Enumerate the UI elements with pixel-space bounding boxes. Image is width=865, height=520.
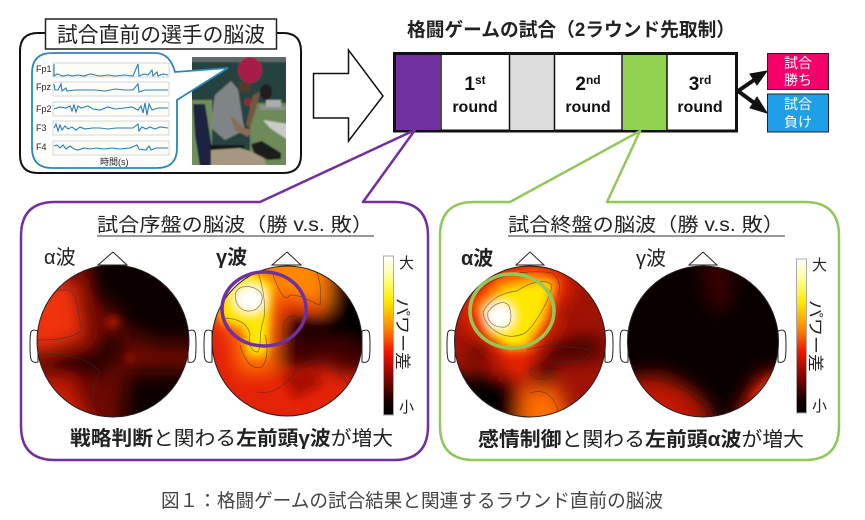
label: 1st round: round bbox=[452, 99, 498, 116]
segment: interval between rounds bbox=[510, 55, 554, 130]
label: 2nd round: nd bbox=[586, 73, 601, 87]
colorbar: power difference early: 大 bbox=[399, 255, 414, 272]
EEG channel F4: F4 bbox=[36, 142, 47, 152]
label: 1st round: 1 bbox=[464, 74, 475, 95]
label: gamma wave: γ波 bbox=[216, 246, 247, 269]
photo: player wearing EEG cap bbox=[190, 55, 288, 167]
label: 3rd round: round bbox=[677, 99, 723, 116]
segment: early match interval bbox=[396, 55, 440, 130]
EEG channel Fpz: Fpz bbox=[36, 82, 52, 92]
colorbar: power difference early: パワー差 bbox=[393, 298, 411, 370]
heading: pre-match EEG bbox=[46, 19, 276, 49]
colorbar: power difference late: 小 bbox=[812, 398, 827, 415]
panel: late match EEG bbox=[440, 131, 839, 460]
panel: pre-match EEG of the player bbox=[20, 19, 301, 173]
topomap: gamma early bbox=[204, 251, 370, 416]
callout: EEG traces bubble bbox=[32, 53, 228, 168]
arrow: from player EEG to match bbox=[314, 50, 383, 141]
label: alpha wave: α波 bbox=[461, 247, 493, 270]
result: match loss: 負け bbox=[784, 114, 812, 130]
highlight circle: left frontal gamma bbox=[222, 272, 306, 346]
label: gamma wave: γ波 bbox=[636, 247, 666, 270]
EEG channel Fp1 bbox=[36, 63, 169, 77]
label: 1st round: st bbox=[475, 73, 486, 87]
colorbar: power difference late: パワー差 bbox=[806, 300, 824, 372]
colorbar: power difference late: 大 bbox=[812, 257, 827, 274]
result: match win bbox=[768, 54, 828, 90]
heading: fighting game match: 格闘ゲームの試合（2ラウンド先取制） bbox=[407, 19, 735, 41]
EEG channel Fpz bbox=[36, 82, 169, 96]
heading: late match: 試合終盤の脳波（勝 v.s. 敗） bbox=[508, 214, 784, 236]
topomap: alpha early bbox=[30, 251, 196, 418]
summary: late match finding: 感情制御と関わる左前頭α波が増大 bbox=[478, 427, 804, 451]
colorbar: power difference early: 小 bbox=[399, 399, 414, 416]
colorbar: power difference late bbox=[796, 257, 827, 415]
segment: late match interval bbox=[623, 55, 667, 130]
summary: early match finding: 戦略判断と関わる左前頭γ波が増大 bbox=[70, 426, 393, 450]
label: 3rd round: 3 bbox=[689, 74, 699, 95]
heading: pre-match EEG: 試合直前の選手の脳波 bbox=[57, 24, 265, 47]
caption: 図１：格闘ゲームの試合結果と関連するラウンド直前の脳波 bbox=[161, 490, 663, 512]
EEG channel Fp2: Fp2 bbox=[36, 104, 52, 114]
label: 3rd round: rd bbox=[699, 73, 711, 87]
highlight circle: left frontal alpha bbox=[470, 274, 554, 348]
EEG channel F3: F3 bbox=[36, 123, 47, 133]
label: 2nd round: 2 bbox=[575, 74, 586, 95]
axis label: time: 時間(s) bbox=[100, 157, 128, 167]
result: match loss: 試合 bbox=[784, 96, 812, 112]
heading: early match: 試合序盤の脳波（勝 v.s. 敗） bbox=[97, 214, 373, 236]
EEG channel F3 bbox=[36, 121, 169, 135]
colorbar: power difference early bbox=[384, 255, 414, 416]
topomap: alpha late bbox=[446, 252, 614, 418]
panel: early match EEG bbox=[21, 130, 428, 460]
result: match win: 試合 bbox=[784, 55, 812, 71]
timeline: match rounds bbox=[394, 54, 736, 131]
label: alpha wave: α波 bbox=[44, 246, 76, 269]
EEG channel F4 bbox=[36, 141, 169, 155]
topomap: gamma late bbox=[620, 252, 786, 418]
EEG channel Fp2 bbox=[36, 102, 169, 116]
EEG channel Fp1: Fp1 bbox=[36, 64, 52, 74]
result: match loss bbox=[768, 94, 828, 132]
result: match win: 勝ち bbox=[784, 72, 812, 88]
arrows: to win or loss bbox=[738, 71, 767, 113]
label: 2nd round: round bbox=[565, 99, 611, 116]
